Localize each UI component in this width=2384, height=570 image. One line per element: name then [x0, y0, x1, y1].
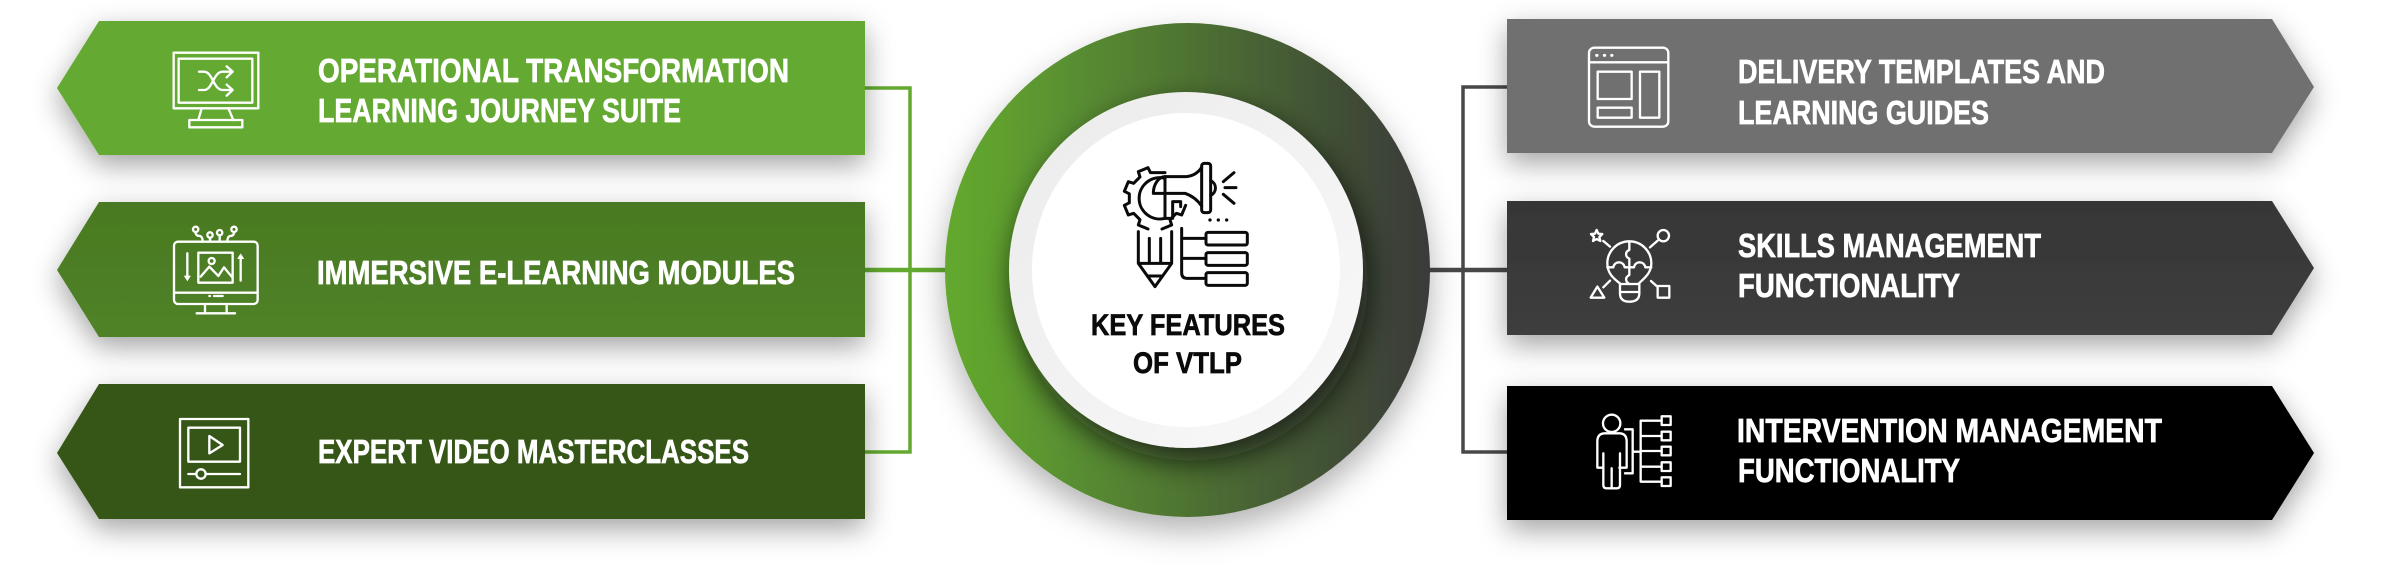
text: operational transformation learning journey suite: OPERATIONAL TRANSFORMATION [318, 52, 789, 89]
icon: monitor with image and circuits [174, 227, 258, 313]
text: skills management functionality: SKILLS MANAGEMENT [1738, 227, 2041, 264]
text: operational transformation learning journey suite [318, 52, 789, 129]
text: intervention management functionality: INTERVENTION MANAGEMENT [1737, 412, 2162, 449]
title: key features of vtlp [1091, 309, 1285, 380]
icon: person with hierarchy [1597, 415, 1671, 488]
panel: skills management [1507, 201, 2314, 335]
connector: right grey bracket [1425, 87, 1507, 452]
title: key features of vtlp: KEY FEATURES [1091, 309, 1285, 342]
text: immersive e-learning modules: IMMERSIVE E-LEARNING MODULES [317, 254, 795, 291]
text: expert video masterclasses: EXPERT VIDEO MASTERCLASSES [318, 433, 749, 470]
icon: gear, megaphone, pencil and hierarchy [1124, 163, 1247, 287]
hub: central circle [945, 23, 1430, 517]
text: skills management functionality: FUNCTIONALITY [1738, 267, 1960, 304]
icon: page layout window [1589, 48, 1668, 127]
panel: expert video masterclasses [57, 384, 865, 519]
icon: monitor with shuffle arrows [174, 53, 258, 127]
text: intervention management functionality: FUNCTIONALITY [1738, 452, 1960, 489]
text: delivery templates and learning guides [1738, 53, 2105, 131]
icon: puzzle light bulb [1591, 230, 1669, 302]
panel: intervention management [1507, 386, 2314, 520]
connector: left green bracket [865, 88, 950, 452]
title: key features of vtlp: OF VTLP [1133, 347, 1242, 380]
text: skills management functionality [1738, 227, 2041, 304]
panel: delivery templates [1507, 19, 2314, 153]
text: delivery templates and learning guides: LEARNING GUIDES [1738, 94, 1989, 131]
panel: operational transformation [57, 21, 865, 155]
text: delivery templates and learning guides: DELIVERY TEMPLATES AND [1738, 53, 2105, 90]
panel: immersive e-learning [57, 202, 865, 337]
text: intervention management functionality [1737, 412, 2162, 489]
text: operational transformation learning journey suite: LEARNING JOURNEY SUITE [318, 92, 681, 129]
icon: video player [180, 419, 248, 487]
